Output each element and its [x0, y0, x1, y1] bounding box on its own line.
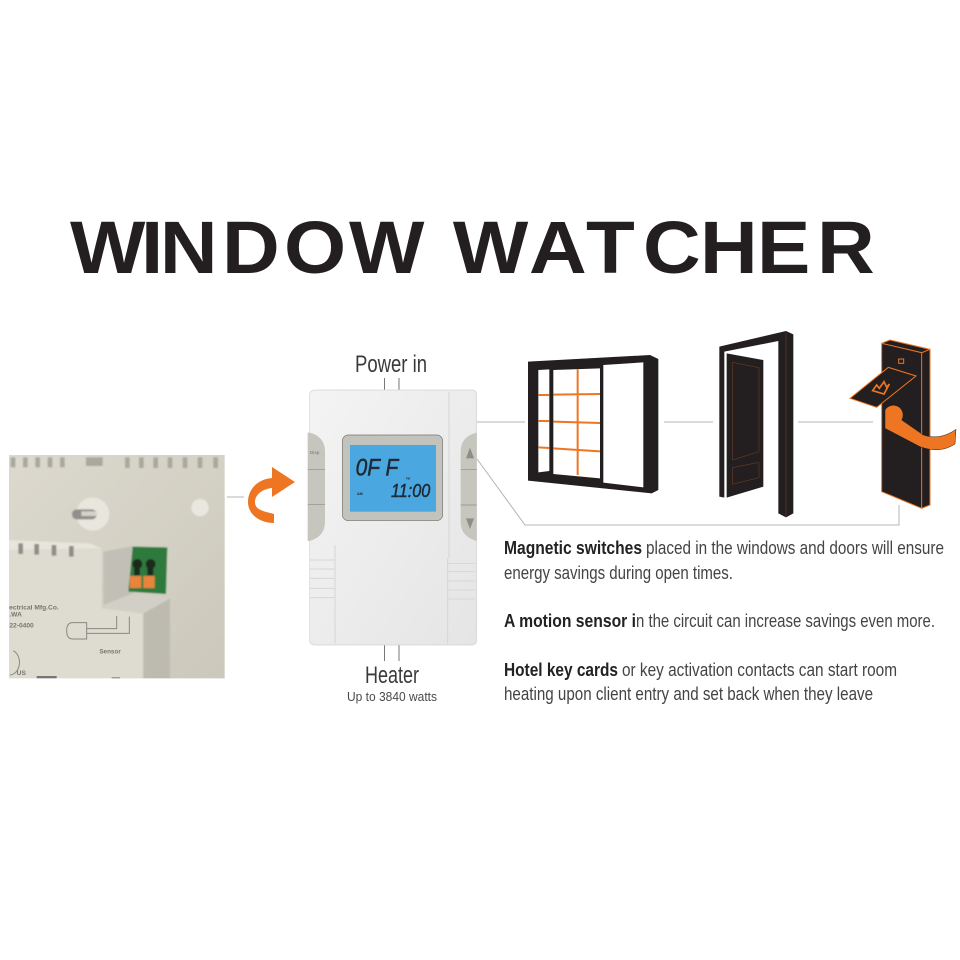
LCD readout: AM [357, 492, 363, 496]
text: hotel key cards: or key activation contacts can start room [622, 660, 897, 680]
LCD readout [356, 455, 431, 501]
icon: hotel key card lock [850, 340, 956, 508]
thermostat device [308, 390, 477, 645]
text: magnetic switches [504, 538, 944, 583]
sensor symbol [10, 616, 129, 675]
icon: window [528, 355, 658, 493]
vent slots [11, 457, 218, 468]
housing slots [18, 543, 74, 557]
right buttons [461, 433, 477, 541]
text: hotel key cards: Hotel key cards [504, 660, 618, 680]
text: hotel key cards [504, 660, 897, 704]
green terminal block [128, 547, 167, 594]
label text on housing [7, 604, 121, 677]
heater label: Heater [365, 662, 419, 689]
text: magnetic switches: energy savings during open times. [504, 563, 733, 583]
left buttons: Disp [310, 450, 320, 455]
LCD screen [350, 445, 436, 512]
LCD readout: 11:00 [391, 480, 431, 501]
icon: orange turn arrow [248, 467, 295, 523]
panel: sensor terminal photo [7, 452, 228, 682]
label text on housing: .WA [9, 612, 22, 619]
LCD bezel [342, 435, 443, 521]
label text on housing: 22-0400 [9, 622, 34, 629]
text: magnetic switches: Magnetic switches [504, 538, 642, 558]
label text on housing: lectrical Mfg.Co. [7, 604, 59, 611]
LCD readout: 0F F [356, 455, 400, 482]
left buttons [308, 433, 325, 541]
LCD readout: PM [406, 477, 411, 481]
title: WINDOW WATCHER [70, 207, 875, 289]
lever handle [885, 405, 956, 450]
text: motion sensor [504, 611, 935, 631]
power in label: Power in [355, 351, 427, 378]
key card [850, 367, 916, 407]
label text on housing: US [17, 670, 26, 677]
label text on housing: Sensor [99, 648, 121, 655]
connector lines [227, 378, 899, 661]
screw mount [72, 497, 109, 531]
mounting dot [191, 499, 209, 516]
text: motion sensor: A motion sensor i [504, 611, 636, 631]
device body [310, 390, 477, 645]
text: hotel key cards: heating upon client entry and set back when they leave [504, 684, 873, 704]
watts label: Up to 3840 watts [347, 689, 437, 704]
lower housing [7, 548, 143, 682]
crown mark [873, 382, 889, 394]
icon: door [719, 331, 793, 517]
